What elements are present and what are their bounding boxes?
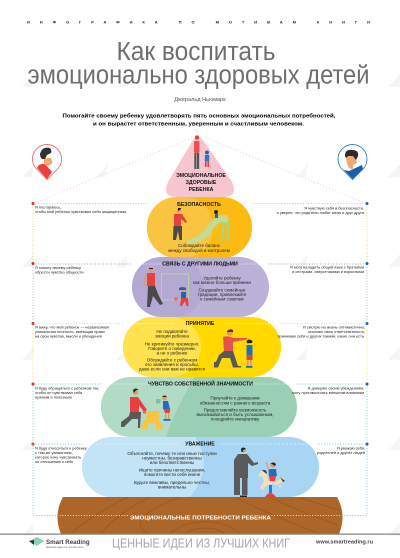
icon: kneeling parent and child <box>214 329 252 368</box>
left notes: Я буду обращаться с ребенком так, <box>35 386 99 390</box>
panel: respect: помогите вести себя иначе <box>144 472 201 477</box>
right notes: Я чувствую себя в безопасности, <box>304 206 364 210</box>
pyramid: emotionally healthy child: РЕБЕНКА <box>189 187 214 193</box>
title: Как воспитать <box>116 38 276 66</box>
left notes: Я постараюсь, <box>35 204 61 210</box>
panel: acceptance: даже если они вам не нравятся <box>139 366 206 372</box>
footer: Ценные идеи из лучших книг <box>46 545 84 549</box>
title: эмоционально здоровых детей <box>28 62 370 90</box>
footer: ЦЕННЫЕ ИДЕИ ИЗ ЛУЧШИХ КНИГ <box>112 536 290 550</box>
panel: acceptance: ПРИНЯТИЕ <box>186 321 215 327</box>
right notes: родителей и других людей <box>317 450 365 455</box>
icon: parent avatar left <box>32 145 62 180</box>
panel: wooden base <box>57 497 343 534</box>
panel: self-worth: обязанностям с раннего возраста <box>200 400 271 406</box>
subtitle: и он вырастет ответственным, уверенным и счастливым человеком. <box>93 122 305 128</box>
panel: safety: БЕЗОПАСНОСТЬ <box>177 202 221 208</box>
panel: connection with others: к семейным советам <box>200 296 244 302</box>
markers <box>32 202 368 446</box>
subtitle <box>62 112 336 128</box>
pyramid: emotionally healthy child: ЗДОРОВЫЕ <box>186 180 217 186</box>
icon: child in triangle <box>205 150 209 167</box>
panel: connection with others: традиции, привлекайте <box>198 291 247 297</box>
right notes: принимаю себя и других такими, какие они есть <box>277 334 364 338</box>
footer: www.smartreading.ru <box>315 540 374 546</box>
subtitle: Помогайте своему ребенку удовлетворять пять основных эмоциональных потребностей, <box>62 112 336 120</box>
left notes: уникальная личность, имеющая право <box>35 329 105 334</box>
panel: connection with others: Уделяйте ребенку <box>203 274 242 280</box>
panel: acceptance: эмоции ребенка <box>155 334 189 338</box>
left notes: чтобы мой ребенок чувствовал себя защищенным. <box>35 209 127 214</box>
panel: self-worth: ЧУВСТВО СОБСТВЕННОЙ ЗНАЧИМОСТИ <box>148 380 253 388</box>
dotted connectors <box>33 204 367 516</box>
panel: connection with others: как можно больше времени <box>193 280 251 285</box>
panel: respect: неуместны, безнравственны <box>142 456 202 460</box>
top label: ИНФОГРАФИКА ПО МОТИВАМ КНИГИ <box>27 20 370 24</box>
panel: safety: Соблюдайте баланс <box>178 242 221 248</box>
panel: acceptance: Говорите о поведении, <box>148 346 196 351</box>
left notes: обрести чувство общности <box>35 270 84 274</box>
panel: acceptance: Не подавляйте <box>156 328 188 334</box>
right notes: могу противостоять внешним влияниям <box>292 390 364 395</box>
right notes: Я смотрю на жизнь оптимистично, <box>303 324 365 330</box>
panel: respect <box>82 437 319 497</box>
panel: self-worth <box>101 377 297 437</box>
icon: parent and slide <box>173 208 229 244</box>
title <box>28 38 370 90</box>
pyramid: emotionally healthy child <box>166 135 234 197</box>
left notes <box>35 204 127 464</box>
pyramid: emotionally healthy child: ЭМОЦИОНАЛЬНОЕ <box>176 173 226 179</box>
panel: safety: между свободой и контролем <box>168 247 230 253</box>
panel: connection with others <box>132 257 269 317</box>
icon: child avatar right <box>338 145 367 180</box>
panel: acceptance <box>123 317 281 377</box>
left notes: чтобы он чувствовал себя <box>35 390 82 395</box>
right notes: я уверен, что родители любят меня и друг друга <box>277 210 365 215</box>
icon: parent and child on rocking horse <box>234 448 285 497</box>
panel: self-worth: высказываться и быть услышанным, <box>197 412 273 417</box>
left notes: с тем же уважением, <box>35 450 73 455</box>
panel: acceptance: его заявления и просьбы, <box>145 362 199 367</box>
panel: connection with others: СВЯЗЬ С ДРУГИМИ ЛЮДЬМИ <box>162 262 238 268</box>
panel: wooden base: ЭМОЦИОНАЛЬНЫЕ ПОТРЕБНОСТИ РЕБЕНКА <box>130 516 272 522</box>
panel: acceptance: Не критикуйте чрезмерно. <box>145 340 199 346</box>
panel: connection with others: Создавайте семейные <box>198 286 246 292</box>
footer: Smart Reading <box>46 539 90 546</box>
dotted diagonals <box>35 137 365 203</box>
panel: respect: Объясняйте, почему те или иные поступки <box>127 450 217 456</box>
right notes <box>277 206 365 455</box>
right notes: осознаю свою ответственность, <box>308 329 365 334</box>
panel: respect: Будьте вежливы, предельно честны, <box>134 480 210 485</box>
panel: acceptance: а не о ребенке <box>157 350 188 356</box>
panel: self-worth: Приучайте к домашним <box>210 394 260 400</box>
left notes: которое хочу чувствовать <box>35 454 81 460</box>
left notes: по отношению к себе <box>35 459 73 464</box>
panel: respect: или безответственны <box>150 460 194 465</box>
left notes: на свои чувства, мысли и убеждения <box>35 334 102 338</box>
left notes: Я помогу своему ребенку <box>35 265 81 270</box>
panel: acceptance: Обсуждайте с ребенком <box>147 356 197 362</box>
icon: parent and child with sand castle <box>121 388 170 429</box>
left notes: Я вижу, что мой ребенок — независимая <box>35 324 109 330</box>
icon: parent and child with ball <box>144 268 188 307</box>
author: Джеральд Ньюмарк <box>174 97 226 103</box>
panel: self-worth: поощряйте инициативу <box>211 416 260 422</box>
panel: respect: Ищите причины непослушания, <box>139 468 205 472</box>
panel: respect: УВАЖЕНИЕ <box>185 442 215 448</box>
right notes: Я уважаю себя, <box>337 446 365 450</box>
footer <box>0 534 400 550</box>
panel: safety <box>147 197 252 258</box>
left notes: нужным и полезным <box>35 394 72 400</box>
panel: self-worth: Предоставляйте возможность <box>204 406 267 412</box>
icon: logo <box>29 537 44 546</box>
right notes: Я могу наладить общий язык с братьями <box>290 264 364 270</box>
right notes: Я доверяю своим убеждениям, <box>308 386 364 390</box>
right notes: и сестрами, сверстниками и взрослыми <box>292 269 364 274</box>
panel: respect: внимательны <box>158 484 186 490</box>
icon: adult in triangle <box>194 135 200 169</box>
left notes: Я буду относиться к ребенку <box>35 446 87 450</box>
